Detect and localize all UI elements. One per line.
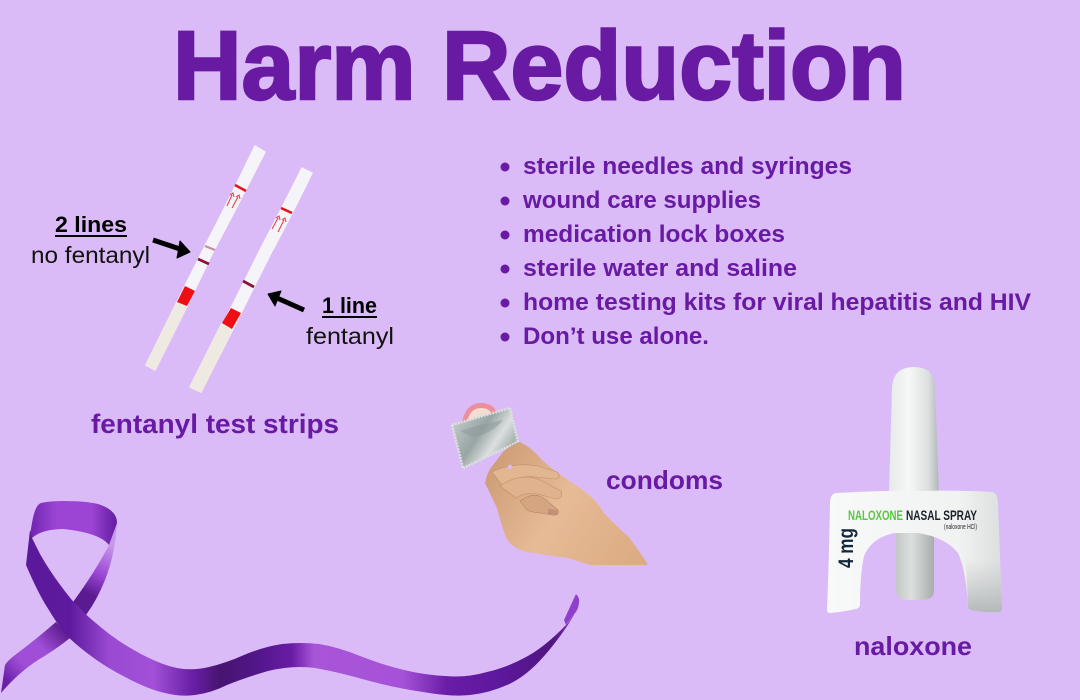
plunger xyxy=(896,530,934,600)
bullet: don't use alone: Don’t use alone. xyxy=(523,323,709,350)
ribbon loop xyxy=(30,501,117,545)
fingers xyxy=(492,465,559,486)
text: no fentanyl: no fentanyl xyxy=(31,242,150,268)
device label xyxy=(835,507,977,568)
bullet: home testing kits: home testing kits for viral hepatitis and HIV xyxy=(523,289,1031,316)
caption: condoms: condoms xyxy=(606,465,723,495)
label: 2 lines: 2 lines xyxy=(55,212,127,237)
icon: hand holding condom xyxy=(452,403,648,565)
icon: naloxone nasal spray xyxy=(827,367,1002,613)
condom ring xyxy=(462,403,497,430)
caption: naloxone: naloxone xyxy=(854,631,972,661)
device label: NASAL SPRAY xyxy=(906,507,977,523)
bullet: sterile needles and syringes: sterile needles and syringes xyxy=(523,153,852,180)
ribbon end tip xyxy=(564,594,579,625)
ribbon right side xyxy=(73,523,117,615)
text: fentanyl: fentanyl xyxy=(306,323,394,349)
bullet: sterile water and saline: sterile water and saline xyxy=(523,255,797,282)
bullet: medication lock boxes: medication lock boxes xyxy=(523,221,785,248)
arrow: to one-line strip xyxy=(268,291,304,310)
caption: fentanyl test strips: fentanyl test strips xyxy=(91,409,339,439)
gap between fingers xyxy=(508,465,512,469)
device body xyxy=(827,491,1002,613)
strip: one line, fentanyl xyxy=(190,168,312,392)
foil wrapper xyxy=(452,408,518,468)
strip: two lines, no fentanyl xyxy=(146,146,265,370)
device leg shading xyxy=(966,560,1002,612)
device label: 4 mg xyxy=(835,528,858,568)
hand xyxy=(485,442,648,565)
fentanyl test strips illustration xyxy=(146,146,312,392)
arrow: to two-line strip xyxy=(153,240,190,258)
icon: purple awareness ribbon xyxy=(1,501,579,696)
ribbon tail xyxy=(1,622,70,693)
nozzle xyxy=(889,367,939,494)
bullet: wound care supplies: wound care supplies xyxy=(522,187,761,214)
title: Harm Reduction xyxy=(173,11,906,120)
device label: NALOXONE xyxy=(848,507,903,523)
label: 1 line: 1 line xyxy=(322,293,377,318)
bullet list xyxy=(500,153,1031,350)
ribbon main band xyxy=(26,530,575,696)
fingernail xyxy=(548,509,558,515)
device label: (naloxone HCl) xyxy=(944,524,977,531)
